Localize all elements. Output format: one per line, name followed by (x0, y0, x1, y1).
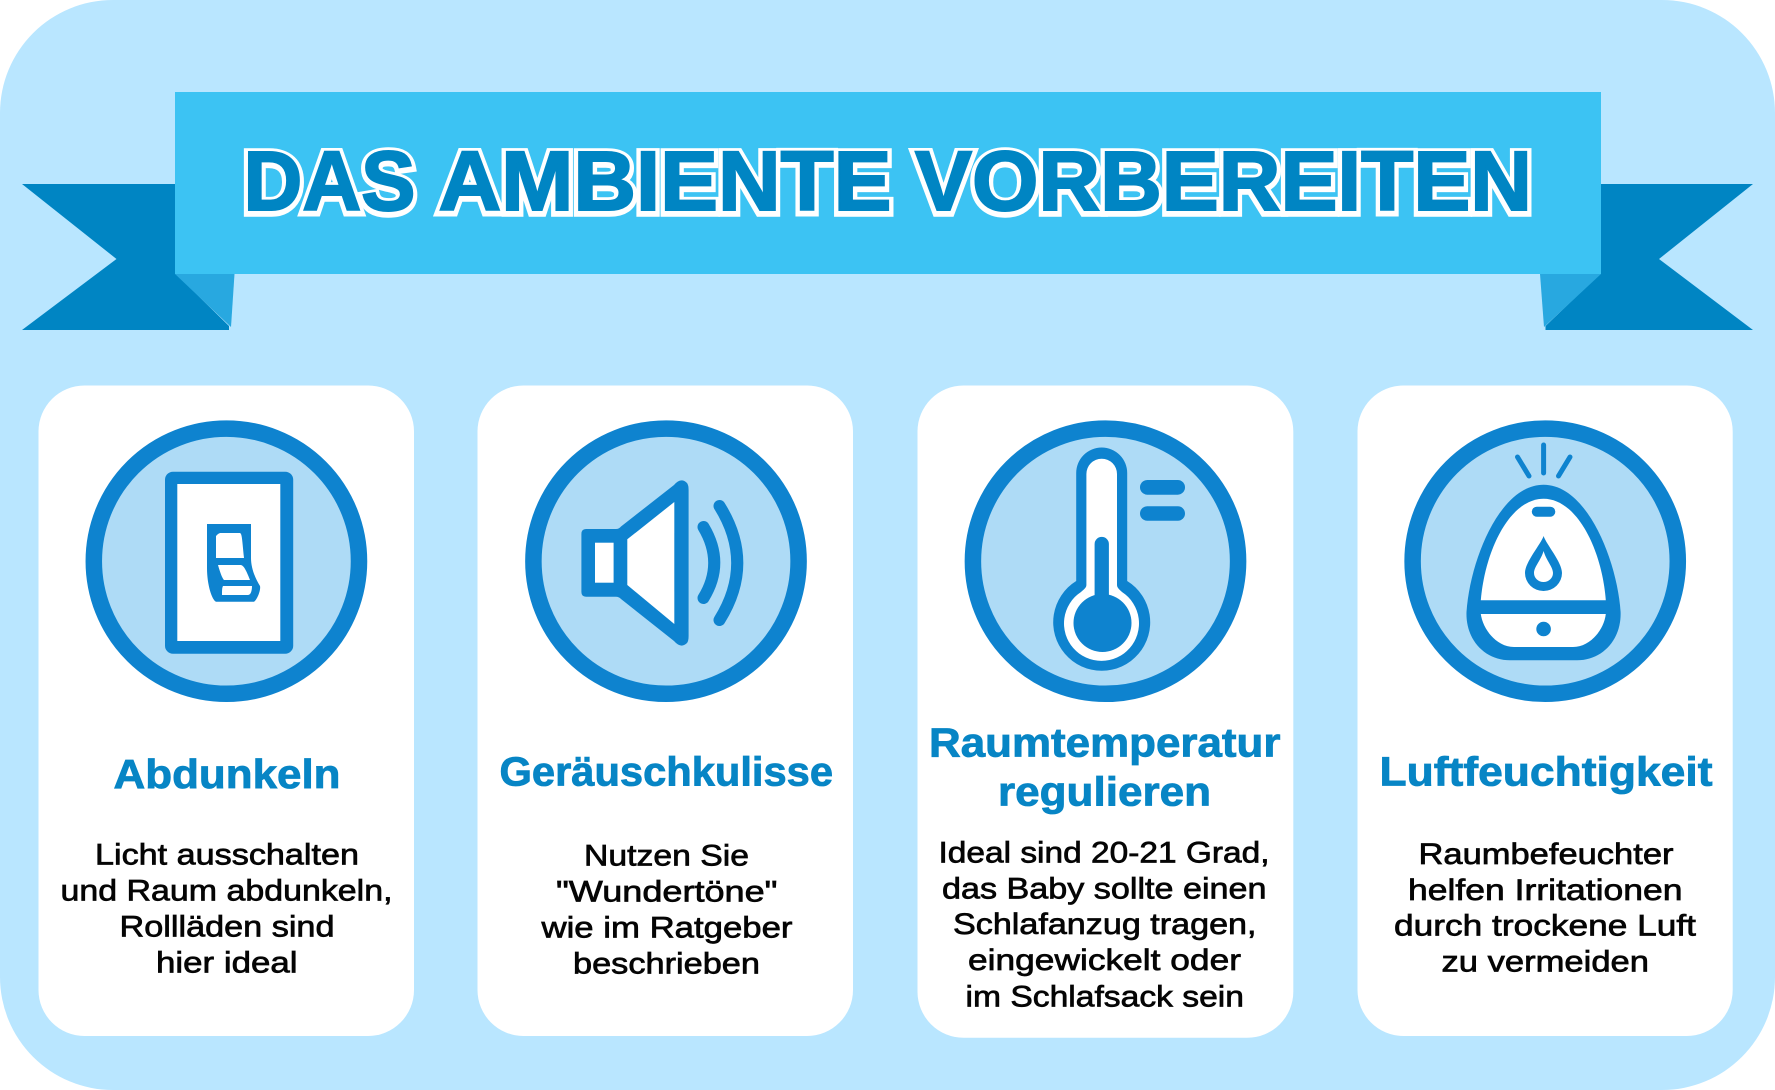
body text: und Raum abdunkeln, (60, 875, 392, 908)
heading: Geräuschkulisse (500, 748, 833, 794)
body text: zu vermeiden (1442, 946, 1649, 979)
body text (540, 840, 793, 980)
body text (1394, 838, 1696, 979)
body text: helfen Irritationen (1408, 874, 1682, 907)
ribbon right fold (1540, 274, 1601, 327)
icon: humidifier (1413, 429, 1678, 694)
body text: beschrieben (573, 947, 760, 980)
body text (938, 837, 1270, 1014)
ribbon left fold (175, 274, 234, 327)
card background (38, 386, 414, 1036)
heading: regulieren (998, 768, 1211, 814)
ribbon left tail (22, 184, 229, 330)
title: AMBIENTE (438, 134, 892, 228)
body text: hier ideal (156, 946, 298, 979)
title: VORBEREITEN (915, 134, 1532, 228)
body text: eingewickelt oder (968, 944, 1241, 977)
title (244, 134, 1532, 230)
card background (478, 386, 853, 1036)
heading: Abdunkeln (114, 751, 340, 797)
body text: das Baby sollte einen (942, 872, 1266, 905)
body text: Schlafanzug tragen, (953, 908, 1256, 941)
panel: Geräuschkulisse (478, 386, 853, 1036)
body text: Licht ausschalten (95, 838, 359, 871)
panel: Luftfeuchtigkeit (1358, 386, 1733, 1036)
card background (918, 386, 1293, 1038)
body text: wie im Ratgeber (540, 911, 793, 944)
panel: Abdunkeln (38, 386, 414, 1036)
body text: Rollläden sind (120, 911, 334, 944)
title ribbon (22, 92, 1753, 330)
body text: Nutzen Sie (584, 840, 749, 873)
ribbon right tail (1546, 184, 1753, 330)
icon: light switch (94, 429, 359, 694)
heading: Raumtemperatur (929, 720, 1281, 766)
body text (60, 838, 392, 979)
heading (929, 720, 1281, 814)
body text: durch trockene Luft (1394, 909, 1696, 942)
ribbon band (175, 92, 1601, 274)
icon: speaker (533, 429, 799, 694)
body text: Raumbefeuchter (1418, 838, 1674, 871)
icon: thermometer (973, 429, 1238, 694)
card background (1358, 386, 1733, 1036)
heading: Luftfeuchtigkeit (1380, 748, 1713, 794)
body text: im Schlafsack sein (966, 981, 1244, 1014)
title: AMBIENTE (438, 136, 892, 230)
body text: Ideal sind 20-21 Grad, (938, 837, 1270, 870)
title: DAS (244, 136, 416, 230)
title: VORBEREITEN (915, 136, 1532, 230)
title: DAS (244, 134, 416, 228)
panel: Raumtemperatur regulieren (918, 386, 1293, 1038)
body text: "Wundertöne" (556, 876, 778, 909)
